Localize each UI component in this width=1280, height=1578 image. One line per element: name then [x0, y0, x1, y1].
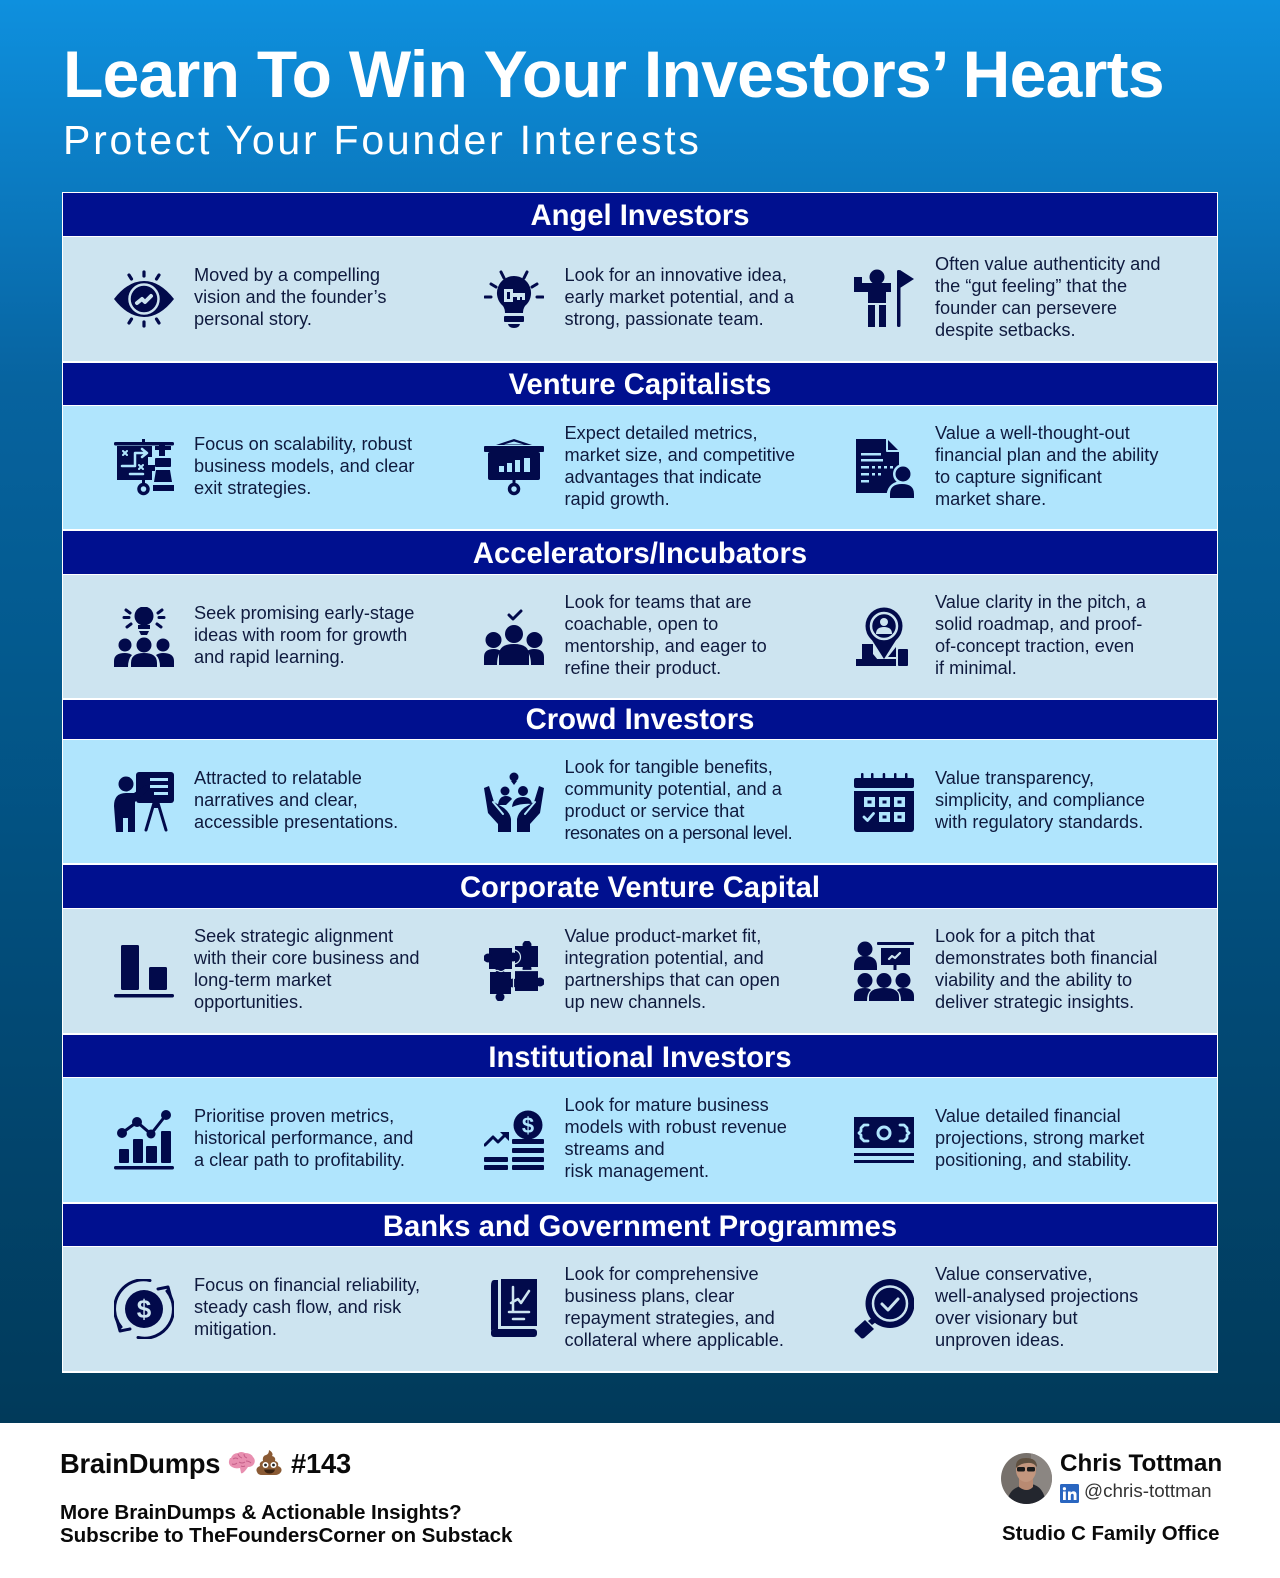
row: Accelerators/Incubators items	[63, 575, 1217, 698]
panel: Institutional Investors	[63, 1035, 1217, 1202]
footer left: subscribe call to action: More BrainDumps & Actionable Insights?	[60, 1501, 462, 1524]
text: vc metrics	[564, 422, 795, 509]
icon: coin and stacks: $	[522, 1113, 534, 1138]
icon: document and person	[856, 439, 914, 498]
text: angel vision	[194, 265, 386, 329]
footer left: BrainDumps label: BrainDumps	[60, 1448, 220, 1479]
icon: brain	[228, 1451, 256, 1475]
text: angel idea	[564, 265, 794, 329]
icon: lightbulb with key	[484, 270, 544, 328]
text: vc metrics: market size, and competitive	[564, 444, 795, 464]
text: accelerators clarity: of-concept traction, even	[935, 636, 1134, 656]
icon: dollar cycle: $	[136, 1294, 151, 1324]
subtitle: Protect Your Founder Interests	[63, 117, 702, 163]
panel: Venture Capitalists	[63, 363, 1217, 529]
text: institutional metrics: a clear path to profitability.	[194, 1150, 405, 1170]
text: banks plans	[564, 1263, 784, 1351]
text: crowd narratives: Attracted to relatable	[194, 767, 362, 787]
icon: coin and stacks	[484, 1110, 544, 1170]
heading: Banks and Government Programmes: Banks and Government Programmes	[383, 1211, 897, 1243]
text: institutional metrics: Prioritise proven metrics,	[194, 1106, 394, 1126]
text: vc financial plan: market share.	[935, 489, 1046, 509]
text: institutional projections: Value detailed financial	[935, 1106, 1121, 1126]
icon: dollar cycle	[114, 1279, 174, 1339]
text: institutional models: streams and	[564, 1139, 665, 1159]
text: accelerators ideas: ideas with room for growth	[194, 624, 407, 644]
text: institutional models: risk management.	[564, 1161, 709, 1181]
icon: audience with board	[854, 942, 914, 1001]
text: accelerators clarity: if minimal.	[935, 658, 1017, 678]
heading: Institutional Investors	[63, 1035, 1217, 1077]
heading: Crowd Investors: Crowd Investors	[526, 704, 754, 736]
icon: person with flag	[854, 270, 914, 327]
text: vc financial plan: financial plan and the ability	[935, 444, 1158, 464]
icon: hands holding people	[484, 772, 544, 832]
row: Venture Capitalists items	[63, 406, 1217, 529]
text: vc financial plan: to capture significant	[935, 466, 1102, 486]
text: crowd narratives	[194, 767, 398, 832]
title: Learn To Win Your Investors’ Hearts	[63, 37, 1164, 111]
text: crowd narratives: narratives and clear,	[194, 789, 358, 809]
text: banks plans: business plans, clear	[564, 1286, 734, 1306]
text: corporate alignment	[194, 926, 419, 1012]
text: institutional metrics	[194, 1106, 413, 1170]
text: crowd transparency	[935, 767, 1145, 832]
family office name: Studio C Family Office	[1002, 1523, 1220, 1545]
text: accelerators clarity: solid roadmap, and proof-	[935, 613, 1142, 633]
text: angel gut feeling: the “gut feeling” that the	[935, 276, 1127, 296]
text: corporate alignment: Seek strategic alignment	[194, 926, 393, 946]
heading: Accelerators/Incubators: Accelerators/Incubators	[473, 538, 807, 570]
text: angel idea: early market potential, and a	[564, 287, 794, 307]
panel: Corporate Venture Capital	[63, 865, 1217, 1033]
text: angel gut feeling: founder can persevere	[935, 298, 1117, 318]
icon: eye	[114, 270, 174, 328]
text: corporate pitch: Look for a pitch that	[935, 926, 1095, 946]
text: vc scalability: exit strategies.	[194, 478, 311, 498]
icon: smiling poop	[256, 1450, 283, 1476]
heading: Crowd Investors	[63, 700, 1217, 739]
row: Crowd Investors items	[63, 740, 1217, 863]
heading: Corporate Venture Capital	[63, 865, 1217, 908]
text: accelerators teams: refine their product.	[564, 658, 721, 678]
heading: Venture Capitalists	[63, 363, 1217, 405]
icon: banknote stack	[854, 1110, 914, 1170]
text: banks projections: over visionary but	[935, 1308, 1078, 1328]
text: corporate product fit: up new channels.	[564, 992, 706, 1012]
text: crowd transparency: simplicity, and compliance	[935, 789, 1145, 809]
text: banks plans: collateral where applicable.	[564, 1330, 784, 1350]
text: angel vision: vision and the founder’s	[194, 287, 386, 307]
icon: puzzle pieces	[484, 941, 544, 1001]
heading: Institutional Investors: Institutional Investors	[488, 1042, 792, 1074]
text: crowd benefits: product or service that	[564, 800, 744, 820]
text: institutional projections: positioning, and stability.	[935, 1150, 1132, 1170]
icon: bar chart	[114, 945, 174, 998]
text: crowd transparency: with regulatory standards.	[935, 812, 1143, 832]
text: accelerators teams	[564, 591, 767, 678]
heading: Angel Investors	[63, 193, 1217, 236]
text: angel gut feeling: Often value authenticity and	[935, 254, 1160, 274]
footer left: subscribe call to action	[60, 1502, 512, 1547]
heading: Banks and Government Programmes	[63, 1204, 1217, 1246]
icon: presenter with board	[114, 772, 174, 832]
panel: Banks and Government Programmes	[63, 1204, 1217, 1371]
text: accelerators ideas: and rapid learning.	[194, 647, 345, 667]
text: corporate alignment: long-term market	[194, 970, 331, 990]
panel: Accelerators/Incubators	[63, 531, 1217, 698]
text: accelerators ideas: Seek promising early-stage	[194, 602, 414, 622]
icon: calendar	[854, 773, 914, 832]
text: corporate pitch	[935, 926, 1157, 1012]
text: institutional models: Look for mature business	[564, 1095, 769, 1115]
text: corporate product fit: partnerships that can open	[564, 970, 780, 990]
row: Angel Investors items	[63, 237, 1217, 361]
icon: team with check mark	[484, 609, 544, 665]
panel: Angel Investors	[63, 193, 1217, 361]
text: crowd benefits: resonates on a personal level.	[564, 823, 792, 843]
text: corporate product fit	[564, 926, 780, 1012]
heading: Corporate Venture Capital: Corporate Venture Capital	[460, 872, 820, 904]
icon: LinkedIn	[1060, 1484, 1079, 1503]
text: institutional models: models with robust revenue	[564, 1117, 787, 1137]
text: vc financial plan: Value a well-thought-out	[935, 422, 1130, 442]
text: banks reliability	[194, 1274, 420, 1340]
icon: location pin with person	[856, 608, 908, 666]
text: angel vision: Moved by a compelling	[194, 265, 380, 285]
icon: growth line and bars	[114, 1110, 174, 1170]
text: angel idea: Look for an innovative idea,	[564, 265, 787, 285]
text: crowd benefits: community potential, and a	[564, 778, 782, 798]
text: banks projections: well-analysed projections	[935, 1286, 1138, 1306]
text: banks reliability: Focus on financial reliability,	[194, 1275, 420, 1295]
heading: Angel Investors: Angel Investors	[531, 200, 749, 232]
text: institutional projections: projections, strong market	[935, 1128, 1144, 1148]
text: accelerators teams: coachable, open to	[564, 613, 718, 633]
text: banks reliability: steady cash flow, and risk	[194, 1297, 401, 1317]
author handle: @chris-tottman	[1084, 1480, 1212, 1501]
footer left: issue number: #143	[291, 1448, 351, 1479]
heading: Venture Capitalists: Venture Capitalists	[509, 369, 771, 401]
text: vc scalability: business models, and clear	[194, 455, 414, 475]
text: institutional models	[564, 1095, 787, 1181]
text: crowd benefits	[564, 756, 792, 843]
text: accelerators clarity	[935, 591, 1146, 678]
text: vc financial plan	[935, 422, 1158, 509]
text: corporate product fit: Value product-market fit,	[564, 926, 761, 946]
text: crowd benefits: Look for tangible benefits,	[564, 756, 773, 776]
text: vc metrics: rapid growth.	[564, 489, 670, 509]
icon: strategy board	[114, 439, 174, 496]
author name: Chris Tottman	[1060, 1450, 1222, 1477]
text: angel vision: personal story.	[194, 309, 312, 329]
text: vc scalability: Focus on scalability, robust	[194, 433, 412, 453]
text: vc metrics: advantages that indicate	[564, 466, 762, 486]
text: vc scalability	[194, 433, 414, 498]
text: corporate pitch: demonstrates both financial	[935, 948, 1157, 968]
footer left: subscribe call to action: Subscribe to TheFoundersCorner on Substack	[60, 1524, 512, 1546]
row: Institutional Investors items	[63, 1078, 1217, 1202]
text: corporate product fit: integration potential, and	[564, 948, 764, 968]
text: accelerators clarity: Value clarity in the pitch, a	[935, 591, 1146, 611]
panel: Crowd Investors	[63, 700, 1217, 863]
text: banks projections: Value conservative,	[935, 1264, 1092, 1284]
icon: book with chart	[484, 1279, 544, 1339]
text: accelerators teams: mentorship, and eager to	[564, 636, 767, 656]
icon: presentation board	[484, 439, 544, 496]
heading: Accelerators/Incubators	[63, 531, 1217, 574]
text: angel gut feeling	[935, 254, 1160, 340]
text: institutional metrics: historical performance, and	[194, 1128, 413, 1148]
text: banks plans: repayment strategies, and	[564, 1308, 775, 1328]
text: banks projections: unproven ideas.	[935, 1330, 1064, 1350]
text: institutional projections	[935, 1105, 1144, 1171]
text: crowd narratives: accessible presentations.	[194, 812, 398, 832]
text: banks projections	[935, 1263, 1138, 1351]
icon: magnifier with check	[854, 1279, 914, 1339]
text: corporate alignment: opportunities.	[194, 992, 303, 1012]
text: vc metrics: Expect detailed metrics,	[564, 422, 758, 442]
investor table	[62, 192, 1218, 1373]
text: accelerators ideas	[194, 602, 414, 667]
icon: lightbulb and three people	[114, 607, 174, 667]
row: Corporate Venture Capital items	[63, 909, 1217, 1033]
text: corporate alignment: with their core business and	[194, 948, 419, 968]
text: banks reliability: mitigation.	[194, 1319, 277, 1339]
row: Banks and Government Programmes items	[63, 1247, 1217, 1371]
text: accelerators teams: Look for teams that are	[564, 591, 752, 611]
text: angel gut feeling: despite setbacks.	[935, 320, 1076, 340]
text: corporate pitch: deliver strategic insights.	[935, 992, 1134, 1012]
text: crowd transparency: Value transparency,	[935, 767, 1094, 787]
text: corporate pitch: viability and the ability to	[935, 970, 1132, 990]
text: banks plans: Look for comprehensive	[564, 1264, 759, 1284]
text: angel idea: strong, passionate team.	[564, 309, 764, 329]
author photo	[1001, 1453, 1052, 1504]
